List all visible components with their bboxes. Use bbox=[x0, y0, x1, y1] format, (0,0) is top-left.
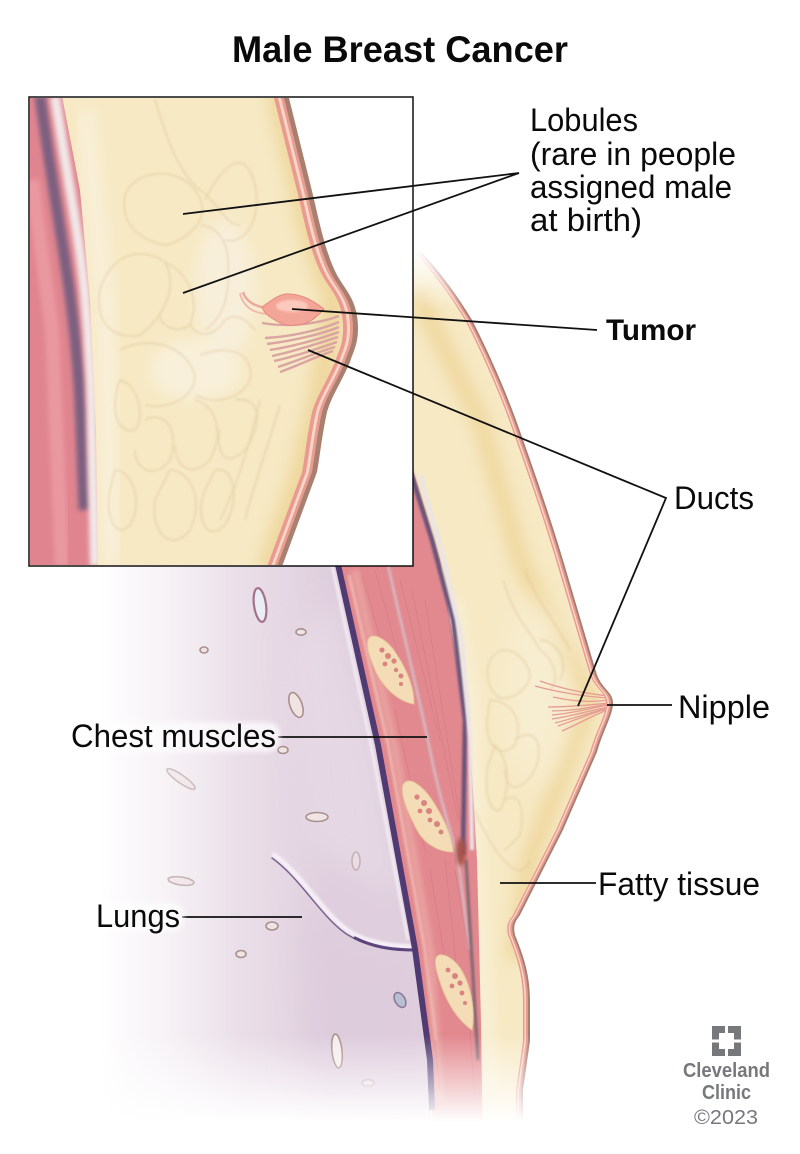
inset tumor bbox=[240, 292, 324, 325]
lobules bbox=[470, 570, 570, 870]
inset frame bbox=[29, 97, 413, 566]
inset ducts bbox=[262, 316, 339, 372]
label: tumor: Tumor bbox=[606, 314, 696, 347]
chest muscles bbox=[330, 470, 483, 1154]
lungs bbox=[137, 566, 428, 1108]
fat pocket in muscle, upper bbox=[368, 636, 414, 704]
title: Male Breast Cancer bbox=[232, 29, 568, 70]
fatty tissue and skin bbox=[403, 250, 613, 1154]
dark fascia beside fat bbox=[410, 470, 465, 855]
label: fatty tissue: Fatty tissue bbox=[598, 866, 760, 902]
logo wordmark bbox=[683, 1060, 770, 1104]
label: nipple: Nipple bbox=[678, 689, 770, 725]
inset panel: magnified tumor view bbox=[28, 90, 413, 572]
label: lobules: (rare in people bbox=[530, 136, 736, 172]
inset muscle band bbox=[30, 98, 98, 565]
fat pocket in muscle, lower bbox=[435, 955, 473, 1030]
ducts bbox=[535, 681, 609, 731]
label: chest muscles: Chest muscles bbox=[71, 718, 276, 754]
copyright: ©2023 bbox=[694, 1107, 758, 1129]
label: ducts: Ducts bbox=[674, 480, 754, 516]
purple pleural border bbox=[337, 560, 432, 1110]
fat pocket in muscle, middle bbox=[402, 781, 453, 852]
muscle fascia line bbox=[388, 565, 470, 950]
lung vessels bbox=[165, 587, 408, 1086]
leader lines bbox=[182, 173, 672, 917]
label: lobules bbox=[530, 102, 736, 238]
lung fissure bbox=[272, 855, 418, 950]
logo wordmark: Clinic bbox=[702, 1082, 751, 1104]
inset skin and fat bbox=[62, 90, 358, 572]
label: lobules: Lobules bbox=[530, 102, 638, 138]
label: lungs: Lungs bbox=[96, 898, 180, 934]
main anatomical illustration bbox=[137, 254, 613, 1117]
label: lobules: at birth) bbox=[530, 202, 642, 238]
icon: cross mark bbox=[712, 1026, 741, 1056]
logo wordmark: Cleveland bbox=[683, 1060, 770, 1082]
inset lobules bbox=[99, 100, 280, 540]
Cleveland Clinic logo bbox=[683, 1026, 770, 1129]
label: lobules: assigned male bbox=[530, 169, 732, 205]
